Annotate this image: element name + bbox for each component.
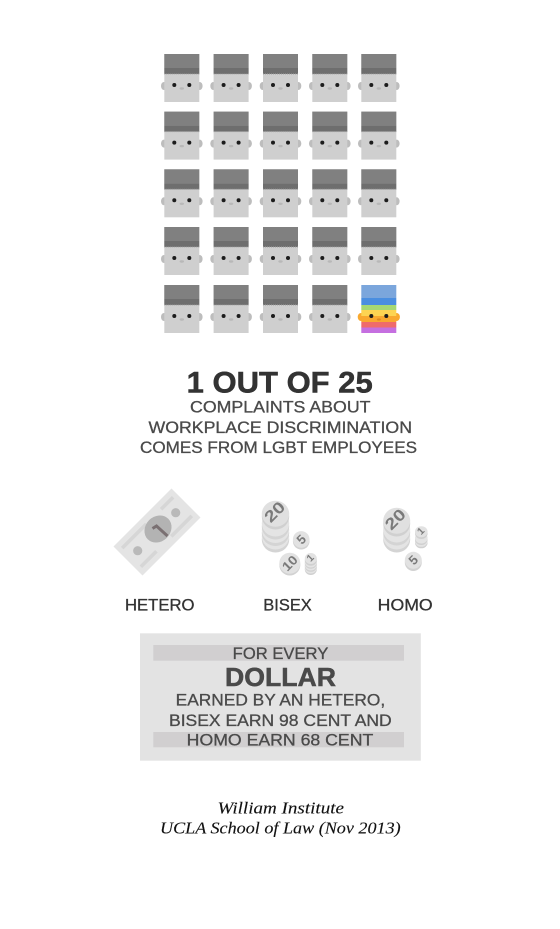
text block: complaints xyxy=(140,399,417,457)
heading: 1 out of 25: 1 OUT OF 25 xyxy=(187,367,373,400)
source credit xyxy=(160,798,401,838)
pictogram grid: 25 faces xyxy=(161,54,400,333)
icon: bisex coins xyxy=(262,499,317,576)
text block: complaints: COMPLAINTS ABOUT xyxy=(190,399,370,417)
row 4 of faces xyxy=(161,227,400,275)
text block: complaints: WORKPLACE DISCRIMINATION xyxy=(148,419,412,437)
source credit: UCLA School of Law (Nov 2013) xyxy=(160,818,401,838)
coin stack 1: 1 xyxy=(415,526,427,538)
coin stack 20: 20 xyxy=(382,506,410,534)
coin 5: 5 xyxy=(405,552,421,568)
panel text: homo earnings: HOMO EARN 68 CENT xyxy=(187,732,373,750)
coin 10: 10 xyxy=(279,552,301,574)
coin stack 20: 20 xyxy=(262,499,289,526)
panel text: bisex earnings: BISEX EARN 98 CENT AND xyxy=(169,712,392,730)
coin 5: 5 xyxy=(293,532,309,547)
row 1 of faces xyxy=(161,54,400,102)
panel text: for every: FOR EVERY xyxy=(233,645,328,663)
row 2 of faces xyxy=(161,112,400,160)
coin stack 1: 1 xyxy=(305,552,317,564)
icon: homo coins xyxy=(382,506,428,571)
label: homo: HOMO xyxy=(378,597,433,615)
panel: for every dollar xyxy=(140,633,421,761)
label: bisex: BISEX xyxy=(263,597,312,615)
panel text: hetero earnings: EARNED BY AN HETERO, xyxy=(176,692,385,710)
icon: dollar bill xyxy=(114,489,200,575)
row 5 of faces, grey xyxy=(161,285,351,333)
source credit: William Institute xyxy=(218,798,345,818)
label: hetero: HETERO xyxy=(125,597,194,615)
text block: complaints: COMES FROM LGBT EMPLOYEES xyxy=(140,439,417,457)
panel text: dollar: DOLLAR xyxy=(225,664,336,692)
row 3 of faces xyxy=(161,169,400,217)
icon: rainbow face xyxy=(358,285,400,333)
